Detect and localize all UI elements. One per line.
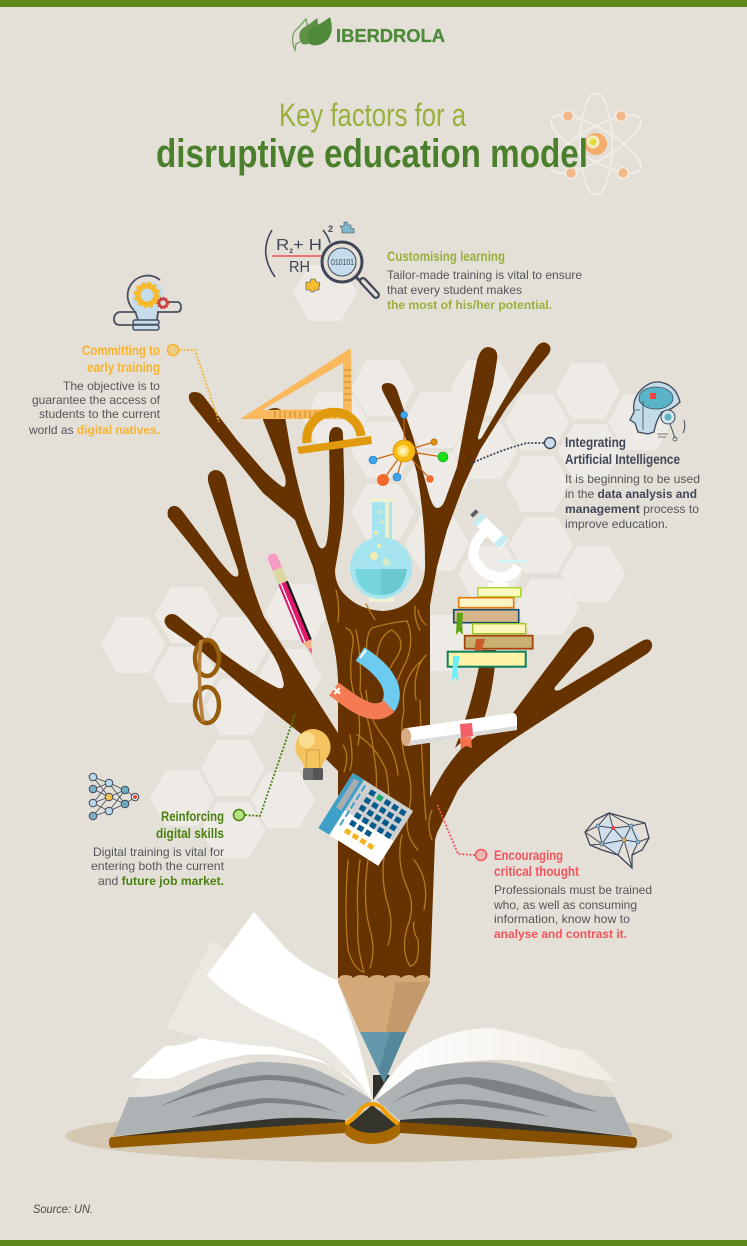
flask: [350, 499, 412, 602]
page shading: [159, 1075, 597, 1118]
book: [448, 652, 526, 667]
text: committing to early training: The objective is to: [63, 379, 160, 393]
spine hollow: [349, 1105, 396, 1133]
protractor: [297, 412, 372, 454]
icon: polygon brain: [585, 813, 649, 868]
pages: back page: [166, 940, 372, 1100]
book: [465, 636, 533, 649]
pages: right white page: [376, 1028, 615, 1100]
text: committing to early training: [28, 342, 161, 437]
icon: formula and magnifier: R: [276, 237, 288, 254]
text: integrating artificial intelligence: improve education.: [565, 517, 668, 531]
magnet: [331, 650, 392, 711]
book: [478, 588, 521, 597]
icon: formula and magnifier: [266, 222, 376, 295]
icon: neural network: [89, 773, 139, 820]
text: committing to early training: world as digital natives.: [28, 423, 160, 437]
text: reinforcing digital skills: digital skills: [156, 825, 224, 841]
connector: yellow: [168, 344, 219, 422]
title line 1: Key factors for a: [279, 97, 466, 133]
bottom bar: [0, 1240, 747, 1246]
source: Source: UN.: [33, 1202, 93, 1216]
text: customising learning: that every student makes: [387, 283, 522, 297]
pencil: [267, 552, 317, 656]
books: [448, 588, 533, 682]
thin branch: [455, 650, 496, 748]
spine: [345, 1122, 400, 1144]
book: [454, 610, 519, 623]
set square: [240, 348, 352, 419]
icon: atom: [544, 93, 648, 195]
glasses: [195, 640, 219, 723]
text: customising learning: [387, 248, 582, 312]
text: integrating artificial intelligence: management process to: [565, 502, 699, 516]
connector: artificial intelligence: [470, 438, 556, 464]
text: encouraging critical thought: information, know how to: [494, 912, 630, 926]
icon: formula and magnifier: 2: [289, 249, 294, 255]
right dark sliver: [400, 1115, 633, 1137]
text: integrating artificial intelligence: It is beginning to be used: [565, 472, 700, 486]
left dark sliver: [113, 1115, 345, 1137]
lead: [373, 1075, 390, 1100]
pages: big white page: [207, 912, 372, 1100]
bookmark: [473, 639, 485, 662]
wordmark: IBERDROLA: [336, 25, 445, 46]
text: reinforcing digital skills: entering both the current: [91, 859, 225, 873]
title line 2: disruptive education model: [156, 132, 588, 176]
text: encouraging critical thought: critical thought: [494, 863, 579, 879]
calculator: [318, 773, 413, 866]
icon: formula and magnifier: 010101: [331, 258, 354, 267]
text: encouraging critical thought: Encouraging: [494, 847, 563, 863]
microscope: [470, 509, 527, 588]
left cover: [109, 1122, 345, 1148]
bookmark: [456, 613, 463, 635]
icon: formula and magnifier: RH: [289, 259, 310, 276]
scroll: [401, 713, 517, 749]
text: reinforcing digital skills: Digital training is vital for: [93, 845, 224, 859]
tree: [164, 342, 652, 978]
pencil tip: [338, 975, 430, 1100]
text: customising learning: Customising learning: [387, 248, 505, 264]
text: committing to early training: guarantee the access of: [32, 393, 161, 407]
book: [473, 624, 526, 634]
pages: right beige layer: [376, 1055, 615, 1100]
text: encouraging critical thought: analyse and contrast it.: [494, 927, 627, 941]
text: reinforcing digital skills: [91, 808, 225, 888]
icon: light bulb with gears: [114, 276, 181, 330]
open book: [109, 1062, 637, 1148]
text: encouraging critical thought: Professionals must be trained: [494, 883, 652, 897]
icon: formula and magnifier: 2: [328, 224, 333, 234]
wood grain: [336, 590, 432, 972]
pages: lower left white page: [131, 1038, 372, 1100]
text: committing to early training: students to the current: [39, 407, 161, 421]
pages: lower left layer: [131, 1060, 372, 1100]
blue tip: [360, 1032, 406, 1083]
text: customising learning: the most of his/her potential.: [387, 298, 552, 312]
right pages: [376, 1062, 633, 1136]
text: committing to early training: early training: [87, 359, 160, 375]
text: customising learning: Tailor-made training is vital to ensure: [387, 268, 582, 282]
text: committing to early training: Committing to: [82, 342, 160, 358]
logo: [292, 17, 445, 50]
text: encouraging critical thought: [493, 847, 652, 941]
connector: red: [437, 804, 486, 860]
top bar: [0, 0, 747, 7]
text: encouraging critical thought: who, as well as consuming: [493, 898, 637, 912]
text: integrating artificial intelligence: Artificial Intelligence: [565, 451, 680, 467]
bookmark: [452, 656, 460, 682]
right cover: [400, 1122, 637, 1148]
spine band: [347, 1104, 397, 1123]
scallops: [338, 975, 430, 982]
text: integrating artificial intelligence: [565, 434, 700, 531]
left pages: [113, 1062, 372, 1136]
icon: formula and magnifier: + H: [293, 237, 322, 254]
book shadow: [65, 1110, 673, 1162]
icon: leaves: [292, 17, 332, 50]
text: reinforcing digital skills: Reinforcing: [161, 808, 224, 824]
molecule: [369, 412, 448, 486]
icon: robot head: [630, 382, 685, 441]
text: integrating artificial intelligence: Integrating: [565, 434, 626, 450]
book: [459, 598, 514, 608]
title: [156, 97, 588, 176]
text: integrating artificial intelligence: in the data analysis and: [565, 487, 697, 501]
bulb: [295, 729, 331, 780]
connector: green: [234, 714, 295, 820]
text: reinforcing digital skills: and future job market.: [98, 874, 224, 888]
cone: [338, 982, 430, 1033]
